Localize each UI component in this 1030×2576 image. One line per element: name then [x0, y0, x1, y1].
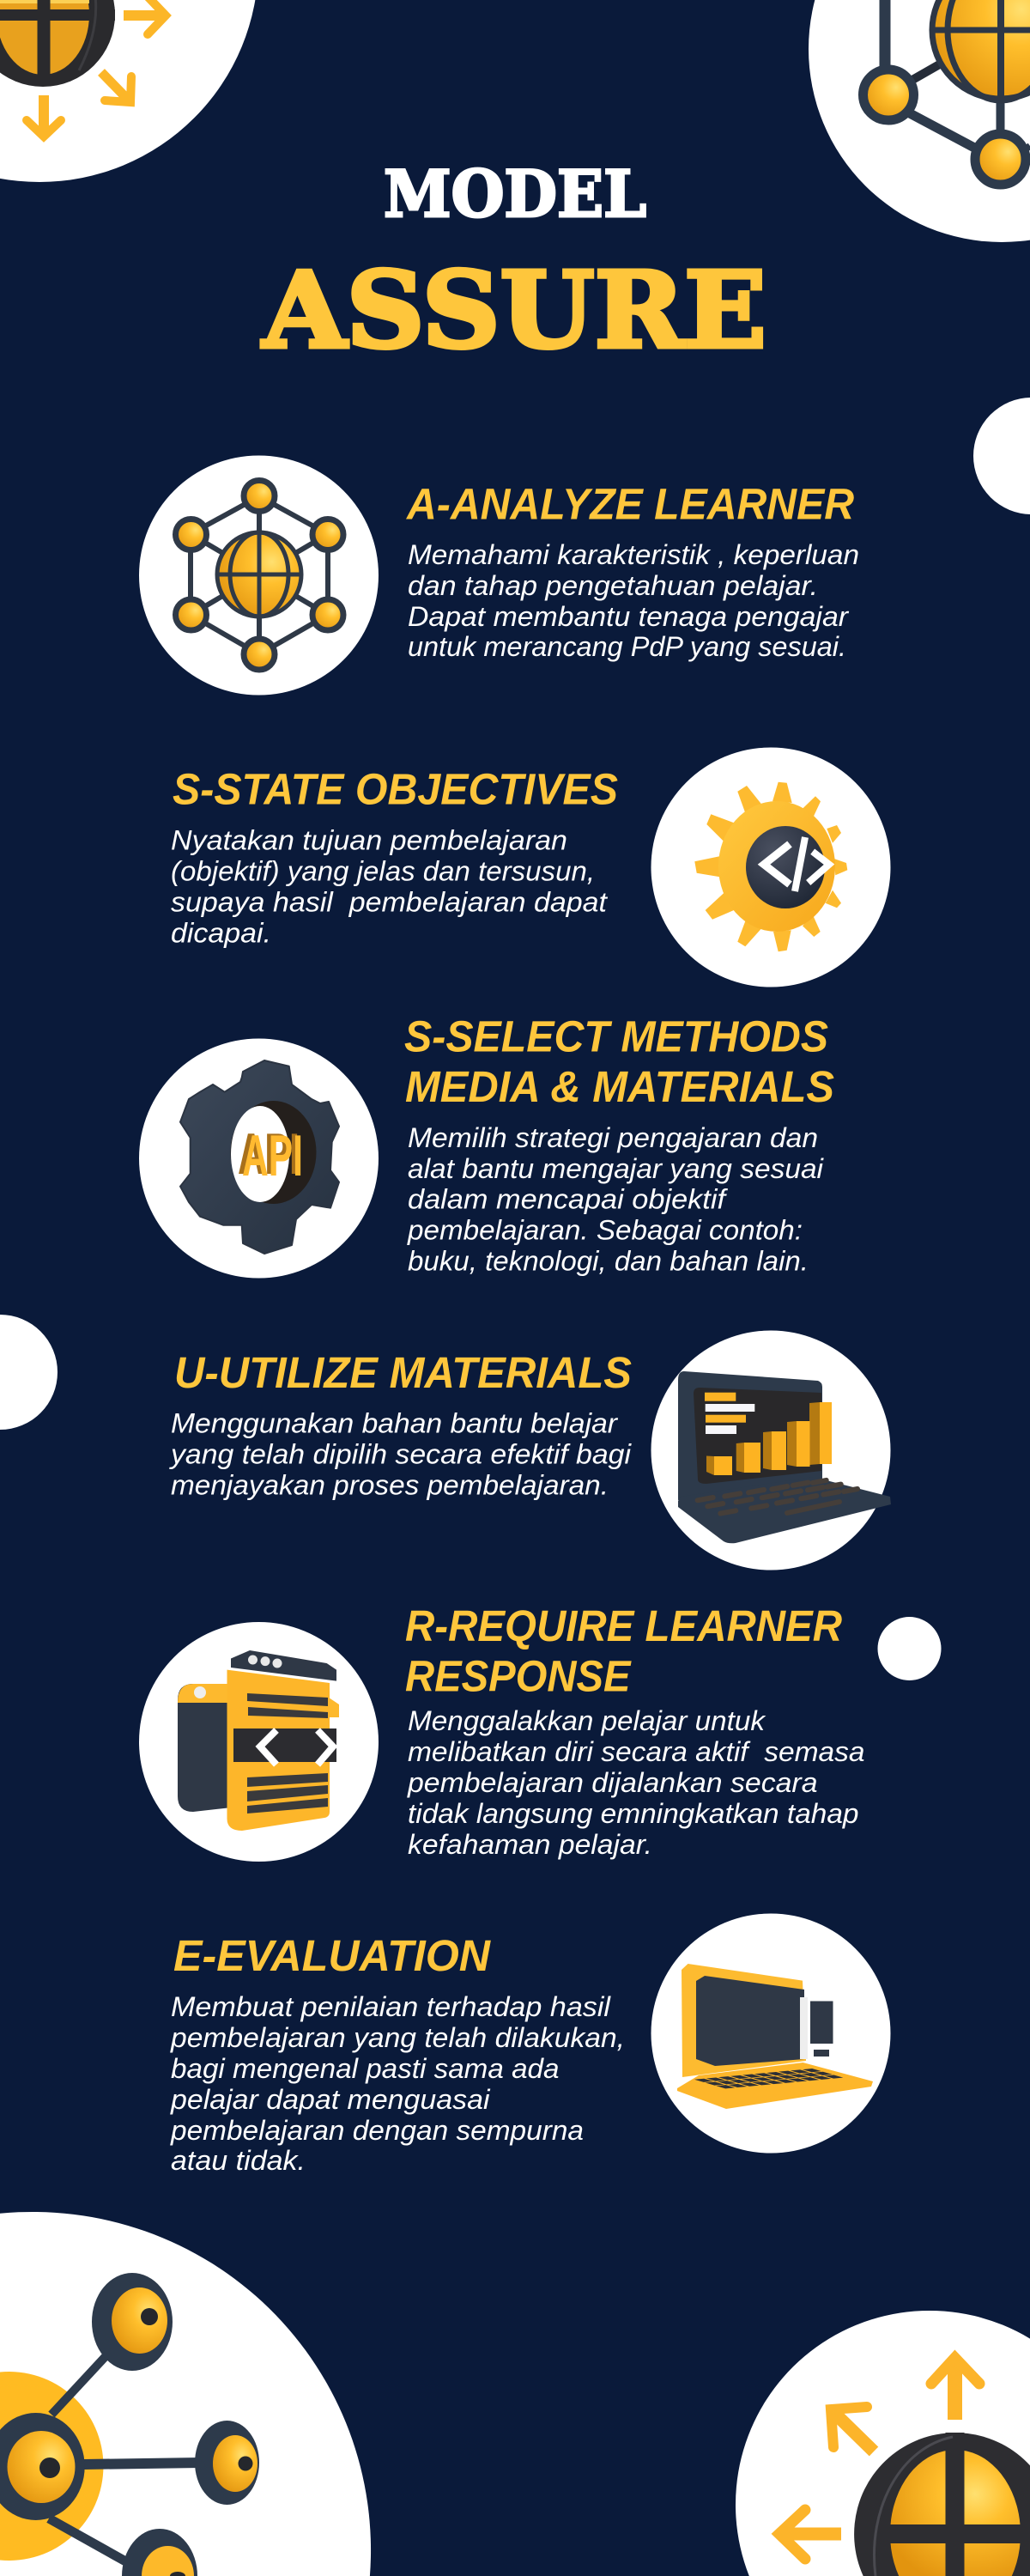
icon: connecting lines [49, 2354, 200, 2563]
icon: central node [0, 2413, 85, 2520]
heading: RESPONSE [405, 1652, 632, 1701]
icon: top node [92, 2273, 173, 2371]
heading: S-STATE OBJECTIVES [173, 764, 618, 814]
body text: Memahami karakteristik , keperluan [408, 539, 859, 570]
title line: ASSURE: ASSURE [262, 248, 766, 372]
body text [407, 1705, 864, 1860]
body text: kefahaman pelajar. [408, 1829, 652, 1860]
icon: bottom node [122, 2529, 197, 2576]
heading: MEDIA & MATERIALS [405, 1062, 834, 1111]
heading: U-UTILIZE MATERIALS [174, 1348, 632, 1397]
body text: Membuat penilaian terhadap hasil [171, 1991, 611, 2022]
heading: S-SELECT METHODS [404, 1012, 828, 1061]
panel: select methods [139, 1012, 834, 1278]
title [262, 156, 766, 372]
body text: pembelajaran dijalankan secara [407, 1767, 817, 1798]
icon: node left [863, 70, 913, 120]
panel: evaluation [170, 1913, 890, 2176]
heading: E-EVALUATION [173, 1931, 491, 1980]
icon: globe [854, 2433, 1030, 2576]
body text: menjayakan proses pembelajaran. [171, 1470, 609, 1501]
icon: yellow sphere [0, 2372, 103, 2561]
body text: pembelajaran. Sebagai contoh: [407, 1215, 803, 1246]
icon: node bottom [975, 134, 1026, 185]
icon: browser windows [139, 1622, 379, 1862]
icon: globe [930, 0, 1030, 101]
body text: yang telah dipilih secara efektif bagi [169, 1439, 632, 1470]
body text: (objektif) yang jelas dan tersusun, [171, 855, 595, 886]
heading [405, 1601, 842, 1701]
body text: Menggunakan bahan bantu belajar [171, 1408, 618, 1439]
body text: pembelajaran dengan sempurna [170, 2115, 584, 2146]
body text: pembelajaran yang telah dilakukan, [170, 2022, 625, 2053]
body text: atau tidak. [171, 2145, 306, 2176]
panel: require learner response [139, 1601, 865, 1862]
icon: code gear [651, 747, 891, 987]
icon: laptop with bar chart [651, 1331, 891, 1570]
icon: API gear [139, 1039, 379, 1278]
icon: connecting lines [885, 0, 1030, 152]
icon: API gear: API [238, 1121, 300, 1187]
icon: arrows [27, 0, 166, 137]
decorative white dot right [973, 398, 1030, 514]
corner: bottom-right globe with arrows [736, 2311, 1030, 2576]
body text [169, 1408, 632, 1501]
panel: analyze learner [139, 455, 859, 696]
icon: yellow laptop [651, 1913, 891, 2154]
body text: alat bantu mengajar yang sesuai [408, 1153, 824, 1184]
icon: hexagon network globe [139, 455, 379, 696]
body text [407, 1122, 824, 1277]
body text: dalam mencapai objektif [408, 1184, 728, 1215]
body text: tidak langsung emningkatkan tahap [408, 1798, 858, 1829]
decorative small white dot [877, 1617, 941, 1680]
body text: dan tahap pengetahuan pelajar. [408, 570, 818, 601]
body text: Memilih strategi pengajaran dan [408, 1122, 818, 1153]
icon: arrows [779, 2358, 979, 2559]
body text: untuk merancang PdP yang sesuai. [408, 631, 846, 662]
body text: supaya hasil pembelajaran dapat [171, 886, 608, 917]
panel: state objectives [171, 747, 891, 987]
body text: bagi mengenal pasti sama ada [171, 2053, 560, 2084]
panel: utilize materials [169, 1331, 891, 1570]
icon: right node [195, 2421, 259, 2505]
heading: A-ANALYZE LEARNER [405, 479, 854, 529]
corner: bottom-left network [0, 2212, 371, 2576]
body text [171, 824, 608, 948]
body text: melibatkan diri secara aktif semasa [408, 1736, 865, 1767]
corner: top-right network globe [809, 0, 1030, 242]
corner: top-left globe with arrows [0, 0, 258, 182]
body text: Menggalakkan pelajar untuk [408, 1705, 766, 1736]
heading: R-REQUIRE LEARNER [405, 1601, 842, 1650]
body text [408, 539, 859, 662]
body text: Dapat membantu tenaga pengajar [408, 601, 849, 632]
body text: pelajar dapat menguasai [170, 2084, 490, 2115]
heading [404, 1012, 834, 1111]
icon: API gear: API [242, 1123, 303, 1188]
title line: MODEL: MODEL [384, 156, 646, 232]
body text: Nyatakan tujuan pembelajaran [171, 824, 567, 855]
decorative white dot left [0, 1315, 58, 1430]
body text [170, 1991, 625, 2176]
body text: buku, teknologi, dan bahan lain. [408, 1246, 809, 1277]
icon: globe [0, 0, 115, 87]
body text: dicapai. [171, 917, 271, 948]
